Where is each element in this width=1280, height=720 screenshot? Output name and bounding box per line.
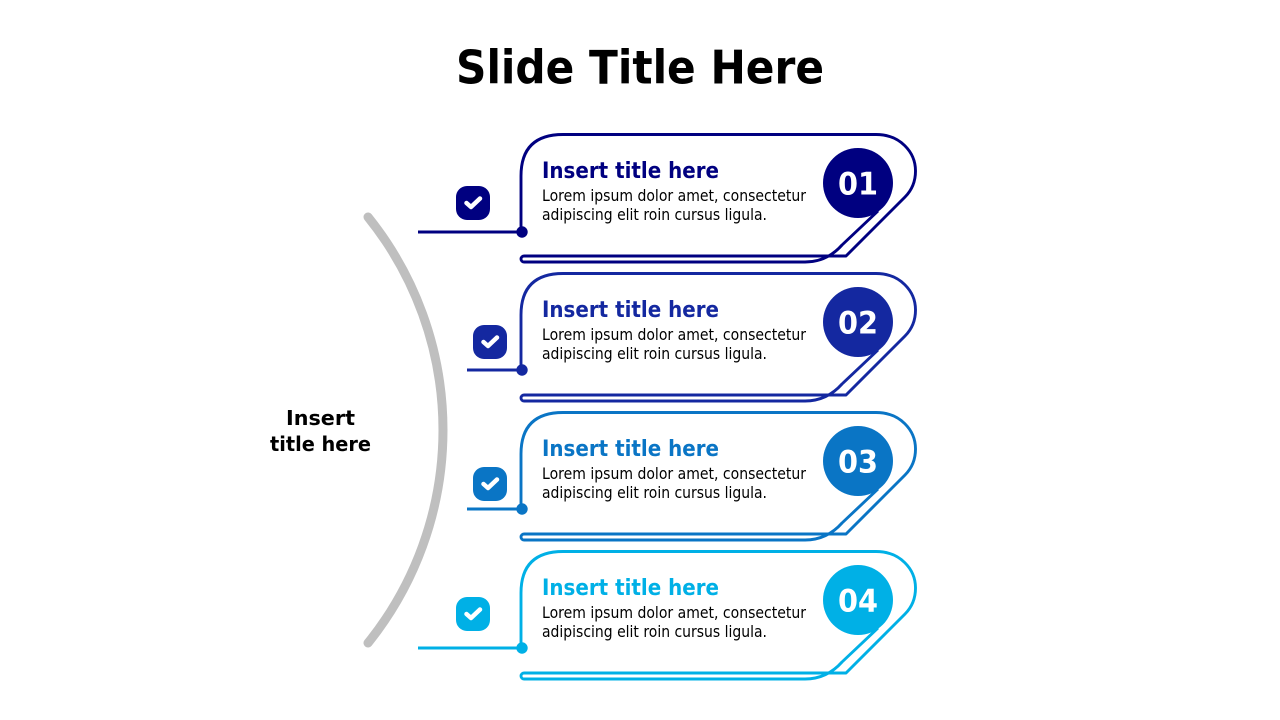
curved arc: [368, 217, 443, 643]
text block 03: [542, 437, 806, 502]
item 01: [418, 134, 916, 262]
number badge 04: [823, 565, 893, 635]
text block 03: Lorem ipsum dolor amet, consectetur: [542, 464, 806, 483]
number badge 02: 02: [838, 306, 878, 342]
item 03: [467, 412, 916, 540]
connector 01: [418, 231, 521, 233]
connector dot 03: [516, 503, 528, 515]
number badge 01: [823, 148, 893, 218]
text block 03: adipiscing elit roin cursus ligula.: [542, 483, 767, 502]
text block 01: [542, 159, 806, 224]
connector 03: [467, 508, 521, 510]
number badge 03: 03: [838, 444, 878, 480]
text block 01: Lorem ipsum dolor amet, consectetur: [542, 186, 806, 205]
text block 01: adipiscing elit roin cursus ligula.: [542, 205, 767, 224]
item 02: [467, 274, 916, 401]
item 04: [418, 552, 916, 679]
connector 04: [418, 647, 521, 649]
connector dot 02: [516, 364, 528, 376]
text block 04: [542, 576, 806, 641]
text block 04: adipiscing elit roin cursus ligula.: [542, 622, 767, 641]
text block 02: Insert title here: [542, 298, 719, 323]
text block 04: Lorem ipsum dolor amet, consectetur: [542, 603, 806, 622]
text block 02: adipiscing elit roin cursus ligula.: [542, 344, 767, 363]
left label: title here: [270, 432, 371, 456]
left label: Insert: [286, 406, 355, 430]
connector dot 01: [516, 226, 528, 238]
check icon 01: [456, 186, 490, 220]
check icon 04: [456, 597, 490, 631]
text block 02: [542, 298, 806, 363]
text block 01: Insert title here: [542, 159, 719, 184]
number badge 04: 04: [838, 584, 878, 620]
text block 03: Insert title here: [542, 437, 719, 462]
text block 02: Lorem ipsum dolor amet, consectetur: [542, 325, 806, 344]
check icon 02: [473, 325, 507, 359]
card outline 01: [521, 134, 916, 262]
check icon 03: [473, 467, 507, 501]
left label: [270, 406, 371, 456]
card outline 04: [521, 552, 916, 679]
card outline 03: [521, 412, 916, 540]
connector 02: [467, 369, 521, 371]
text block 04: Insert title here: [542, 576, 719, 601]
number badge 01: 01: [838, 166, 878, 202]
number badge 03: [823, 426, 893, 496]
number badge 02: [823, 287, 893, 357]
card outline 02: [521, 274, 916, 401]
connector dot 04: [516, 642, 528, 654]
title: Slide Title Here: [456, 40, 824, 94]
